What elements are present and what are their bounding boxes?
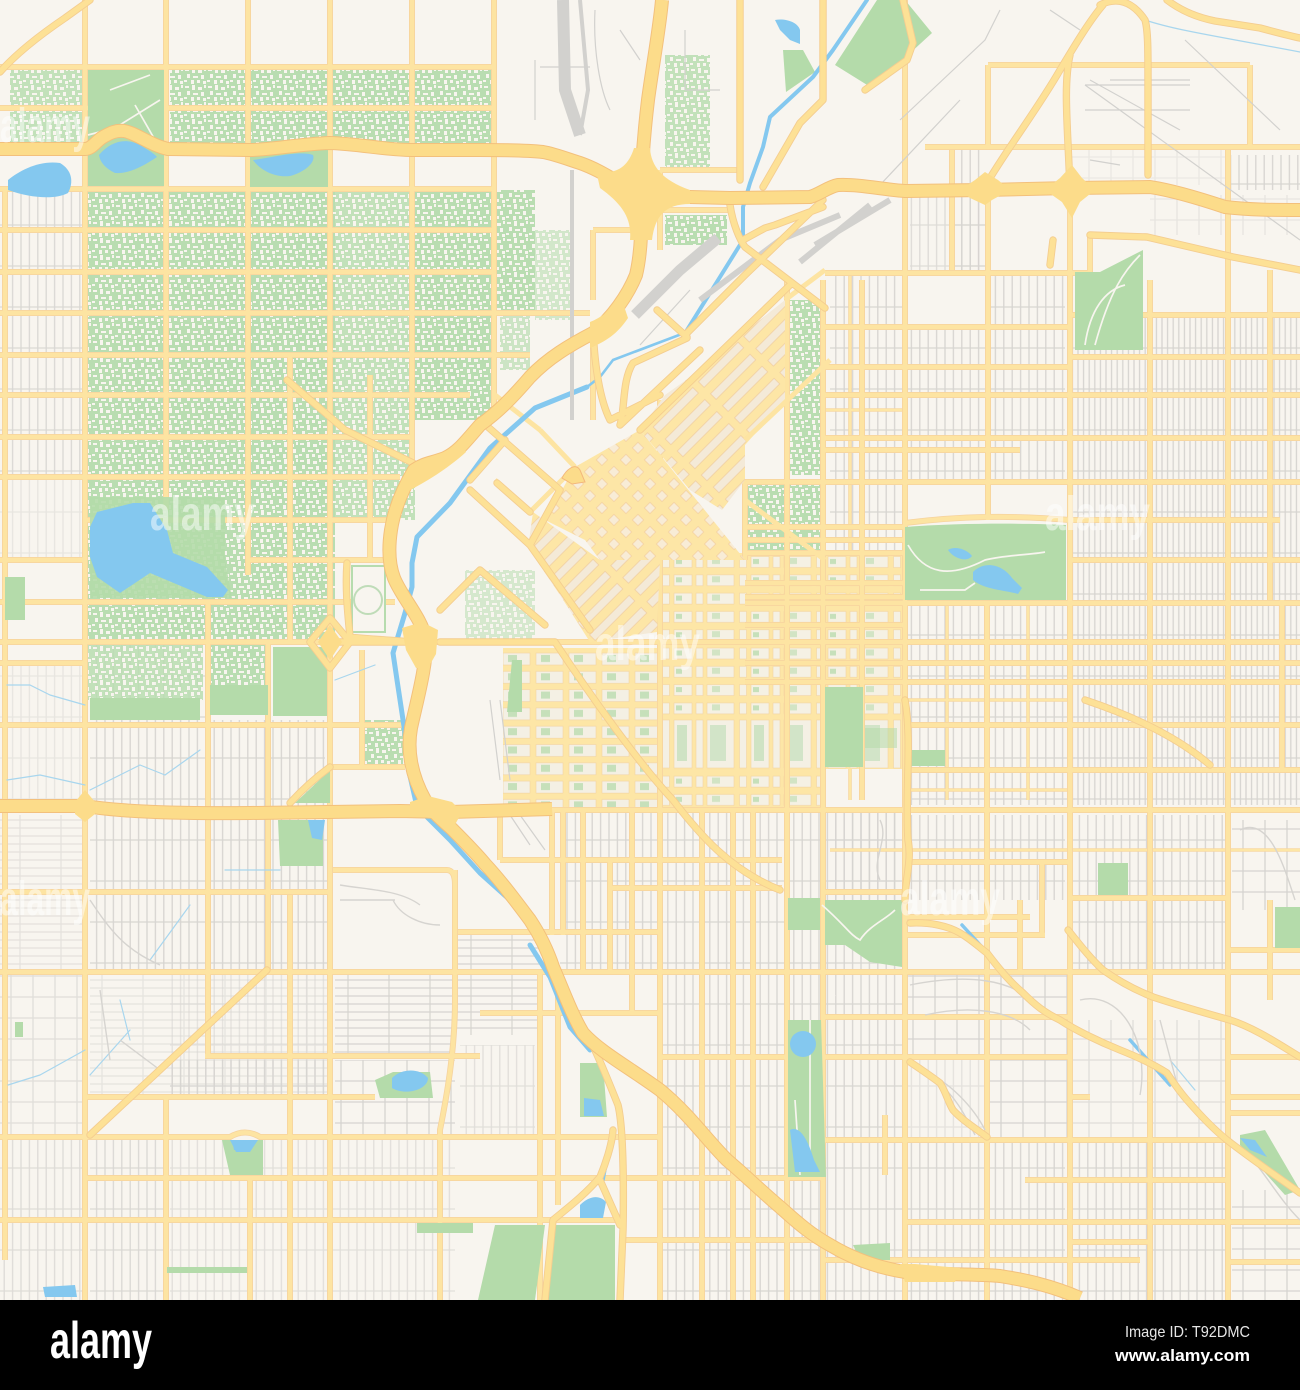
website: www.alamy.com [1114,1346,1250,1365]
logo: alamy: alamy [50,1312,152,1370]
interchanges [75,148,1095,1282]
stadium complex [352,566,385,632]
lake: Rocky Mountain [253,153,313,176]
downtown lower-left long blocks [528,512,660,642]
central lower blocks [663,769,820,807]
golf and park paths [88,75,1140,1175]
watermark [0,100,1150,926]
west of Broadway blocks [503,648,660,808]
interchange: US-6 [410,796,462,830]
watermark: alamy [0,873,90,926]
park: Berkeley [88,70,164,186]
park: Ruby Hill area [788,898,902,967]
rail yards [490,0,1300,850]
lake: Smith [790,1031,816,1057]
downtown small block diagonal grid [547,432,745,560]
park: north triangle [835,0,932,88]
watermark: alamy [1045,488,1150,541]
central tall blocks [660,717,905,769]
park: Sloan's Lake [90,497,232,598]
park: Cheesman [825,687,863,767]
image id: Image ID: T92DMC [1125,1324,1250,1341]
downtown edge diagonals [495,270,830,560]
interchange: Evans south [900,1264,960,1282]
lake: City Park [973,565,1022,594]
LoDo long blocks [640,300,785,510]
watermark: alamy [0,100,90,153]
local yellow streets [826,276,1300,852]
park: south bottom [545,1225,615,1300]
lake: Ferril [948,548,972,559]
interchange: east I-70 A [960,172,1010,205]
interchange: Colfax [402,622,438,668]
lake: Grasmere [790,1129,820,1172]
park: City Park [905,524,1066,600]
park: golf east [1075,250,1143,350]
park: Rocky Mountain Lake [250,150,328,187]
central street grid south of downtown [660,553,905,717]
small parks [15,647,1300,1273]
footer bar [0,1300,1300,1390]
interchange: I-70 / I-25 [596,148,690,240]
interchange: 23rd [410,442,466,490]
curved suburban streets [90,820,1300,1220]
green residential neighbourhoods [10,55,823,765]
lake: Sloan's [90,503,228,597]
river crossing spur [562,467,585,484]
watermark: alamy [150,488,255,541]
interchange: Speer [590,300,628,348]
lake: Inspiration [8,162,71,197]
park: Washington Park [788,1020,826,1177]
park: botanic gardens [865,728,897,748]
watermark: alamy [900,873,1000,926]
lake: Berkeley [99,141,157,173]
interchange: east I-70 B [1045,165,1095,218]
park: Northfield [783,50,815,92]
interchange: west US-6 [75,790,95,822]
park: squares [5,577,1300,948]
watermark: alamy [595,618,700,671]
